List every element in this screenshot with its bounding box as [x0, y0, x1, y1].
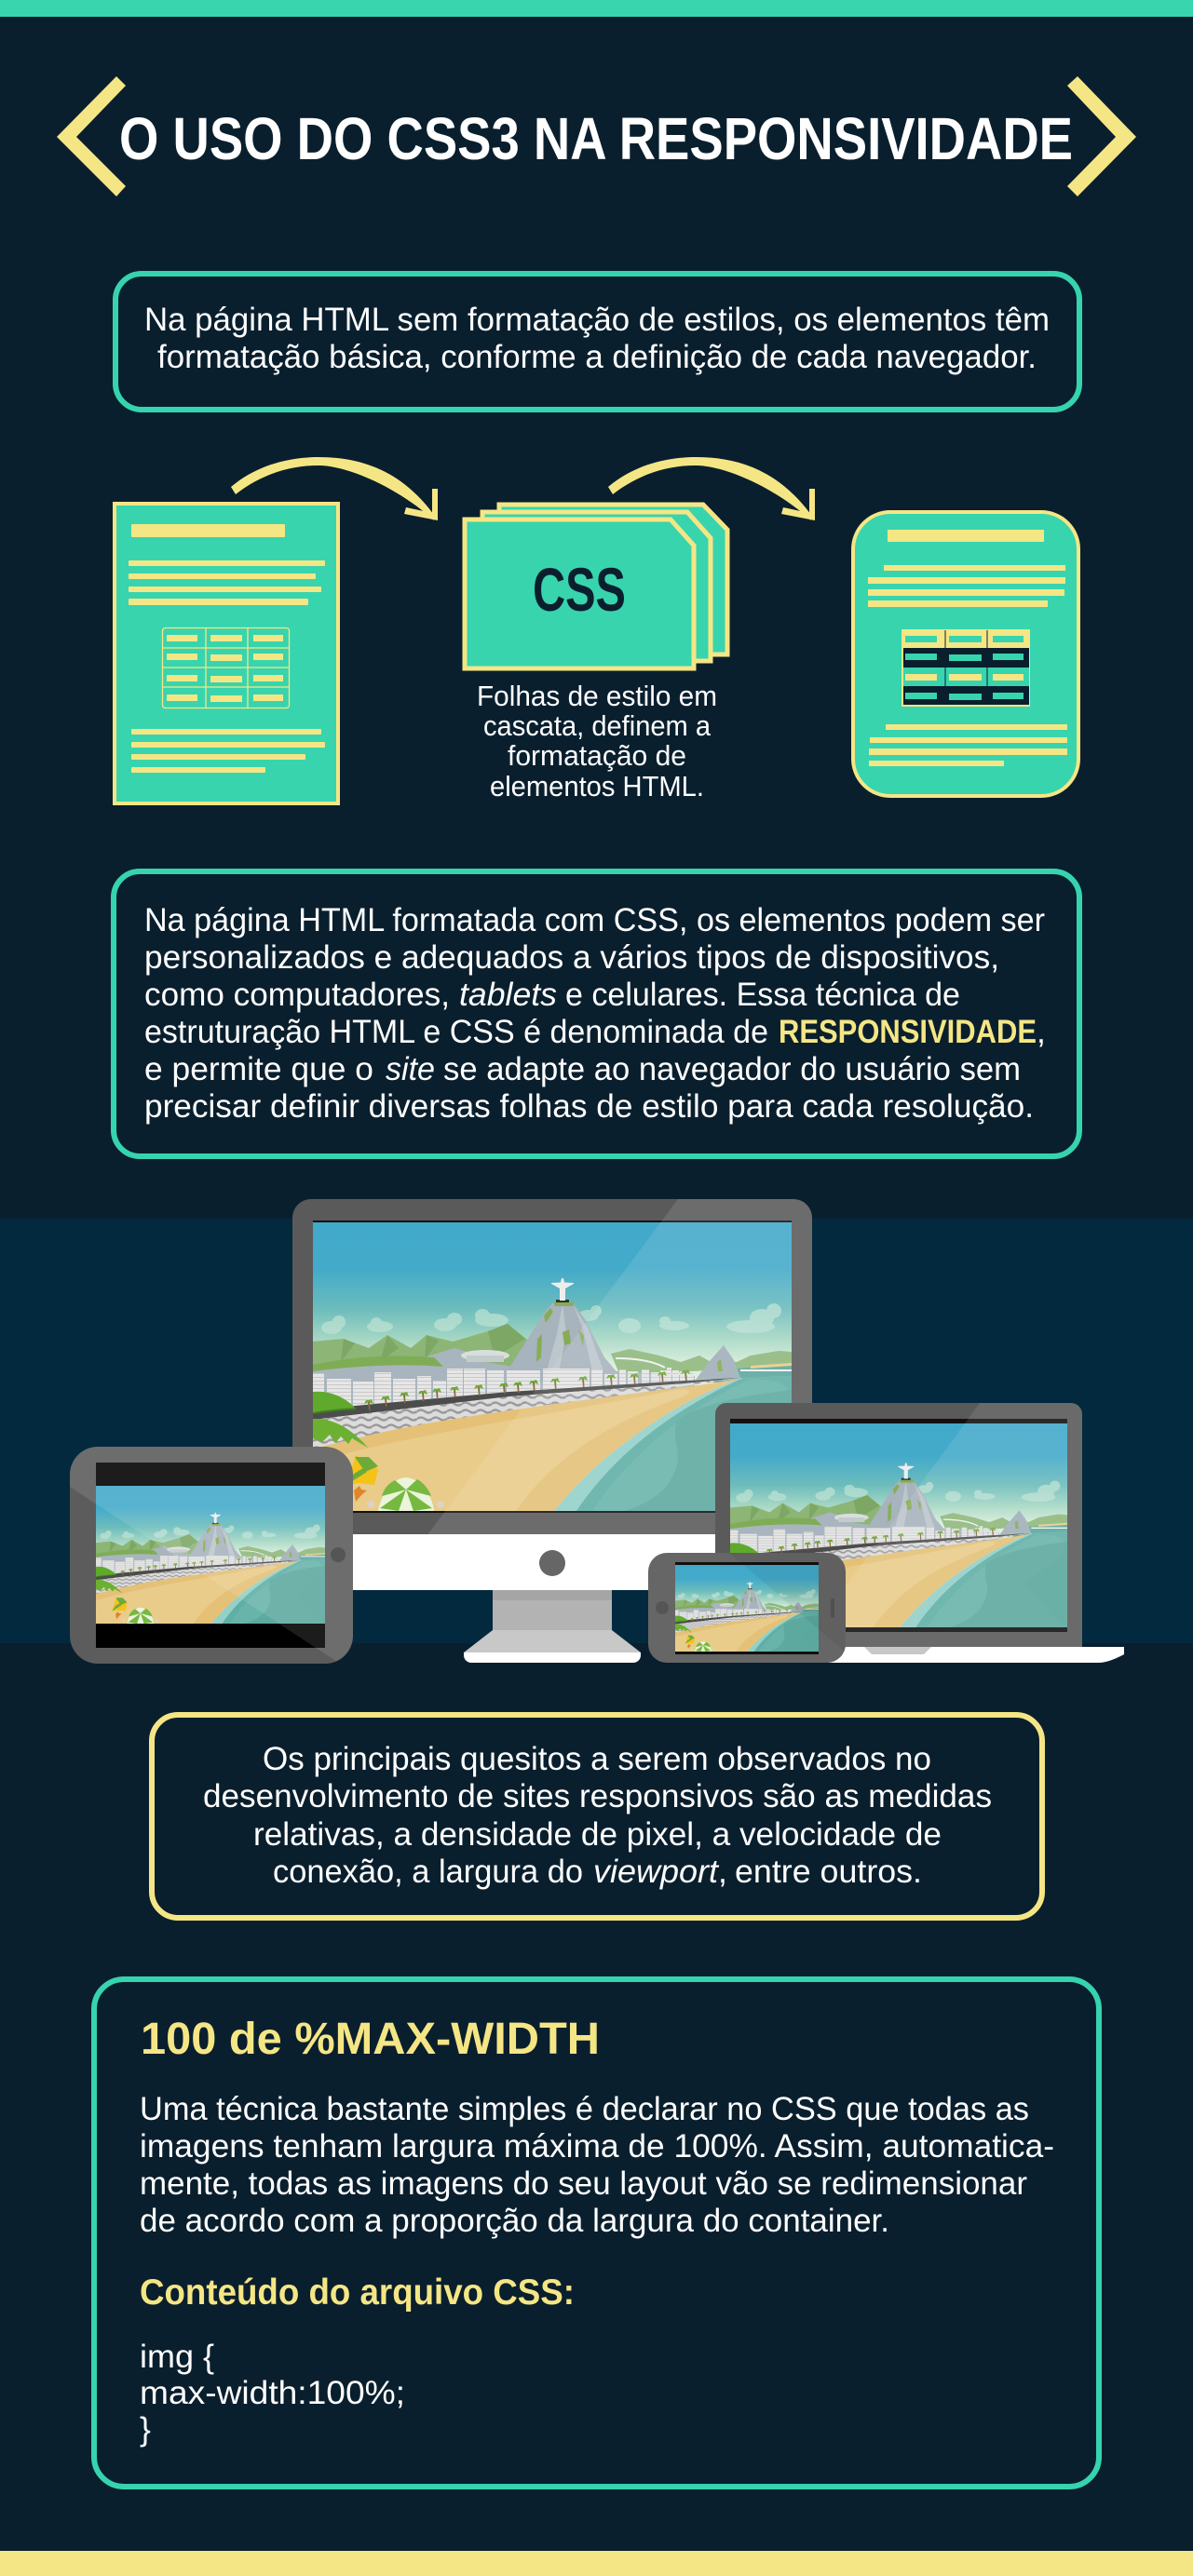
panel: key requirements callout: viewport	[593, 1853, 720, 1890]
bottom accent bar	[0, 2551, 1193, 2576]
device: phone	[648, 1553, 852, 1663]
devices band	[0, 1219, 1193, 1643]
panel: responsive explanation: e celulares. Essa técnica de	[565, 976, 960, 1013]
panel: responsive explanation: Na página HTML formatada com CSS, os elementos podem ser	[144, 901, 1045, 938]
arrow: document to CSS	[231, 457, 438, 520]
panel: responsive explanation: estruturação HTML e CSS é denominada de	[144, 1013, 768, 1050]
caption: cascading style sheets: cascata, definem a	[483, 710, 711, 742]
icon: unformatted document	[115, 504, 338, 803]
title with chevrons	[57, 76, 1136, 196]
illustration: responsive devices	[70, 1199, 1124, 1664]
panel: responsive explanation: e permite que o	[144, 1050, 373, 1087]
panel: intro callout: Na página HTML sem formatação de estilos, os elementos têm	[144, 301, 1050, 338]
panel: intro callout: formatação básica, conforme a definição de cada navegador.	[157, 338, 1037, 375]
icon: left chevron	[57, 76, 126, 196]
device: desktop monitor	[292, 1199, 820, 1663]
text block: technique description: de acordo com a proporção da largura do container.	[140, 2202, 889, 2239]
heading: CSS file content: Conteúdo do arquivo CSS:	[140, 2273, 575, 2313]
panel: key requirements callout: desenvolvimento de sites responsivos são as medidas	[203, 1777, 992, 1814]
panel: key requirements callout: entre outros.	[735, 1853, 922, 1890]
text block: technique description: imagens tenham largura máxima de 100%. Assim, automatica-	[140, 2127, 1054, 2165]
top accent bar	[0, 0, 1193, 17]
icon: formatted page on device	[853, 512, 1078, 796]
code sample: img {	[140, 2338, 214, 2375]
code sample	[140, 2338, 405, 2448]
device: laptop	[672, 1403, 1124, 1663]
panel: responsive explanation: site	[386, 1050, 435, 1087]
panel: responsive explanation: RESPONSIVIDADE	[779, 1013, 1037, 1050]
text block: technique description: mente, todas as imagens do seu layout vão se redimensionar	[140, 2165, 1027, 2202]
panel: key requirements callout: conexão, a largura do	[273, 1853, 583, 1890]
panel: responsive explanation: se adapte ao navegador do usuário sem	[443, 1050, 1021, 1087]
code sample: max-width:100%;	[140, 2374, 405, 2411]
panel: key requirements callout	[152, 1715, 1042, 1918]
panel: responsive explanation: personalizados e adequados a vários tipos de dispositivos,	[144, 938, 999, 976]
panel: responsive explanation	[114, 871, 1079, 1156]
panel: responsive explanation: como computadores,	[144, 976, 450, 1013]
panel: 100% max-width technique	[94, 1979, 1099, 2487]
panel: key requirements callout: ,	[718, 1853, 727, 1890]
code sample: }	[140, 2410, 151, 2448]
panel: intro callout	[115, 274, 1079, 410]
icon: stacked CSS sheets	[465, 505, 727, 668]
panel: key requirements callout: Os principais quesitos a serem observados no	[263, 1740, 931, 1777]
caption: cascading style sheets: formatação de	[508, 740, 686, 772]
panel: responsive explanation: ,	[1037, 1013, 1046, 1050]
icon: right chevron	[1067, 76, 1136, 196]
panel: responsive explanation: precisar definir diversas folhas de estilo para cada resolução.	[144, 1087, 1034, 1125]
arrow: CSS to styled page	[608, 457, 815, 520]
diagram: unstyled page, CSS sheets, styled page	[115, 457, 1078, 803]
panel: responsive explanation: tablets	[459, 976, 557, 1013]
label: CSS: CSS	[533, 555, 626, 624]
caption: cascading style sheets: elementos HTML.	[490, 771, 704, 802]
caption: cascading style sheets	[477, 681, 717, 802]
text block: technique description: Uma técnica bastante simples é declarar no CSS que todas as	[140, 2090, 1029, 2127]
panel: key requirements callout: relativas, a densidade de pixel, a velocidade de	[253, 1815, 942, 1853]
caption: cascading style sheets: Folhas de estilo em	[477, 681, 717, 712]
device: tablet	[70, 1447, 359, 1664]
text block: technique description	[140, 2090, 1054, 2239]
heading: max-width: 100 de %MAX-WIDTH	[141, 2015, 600, 2064]
